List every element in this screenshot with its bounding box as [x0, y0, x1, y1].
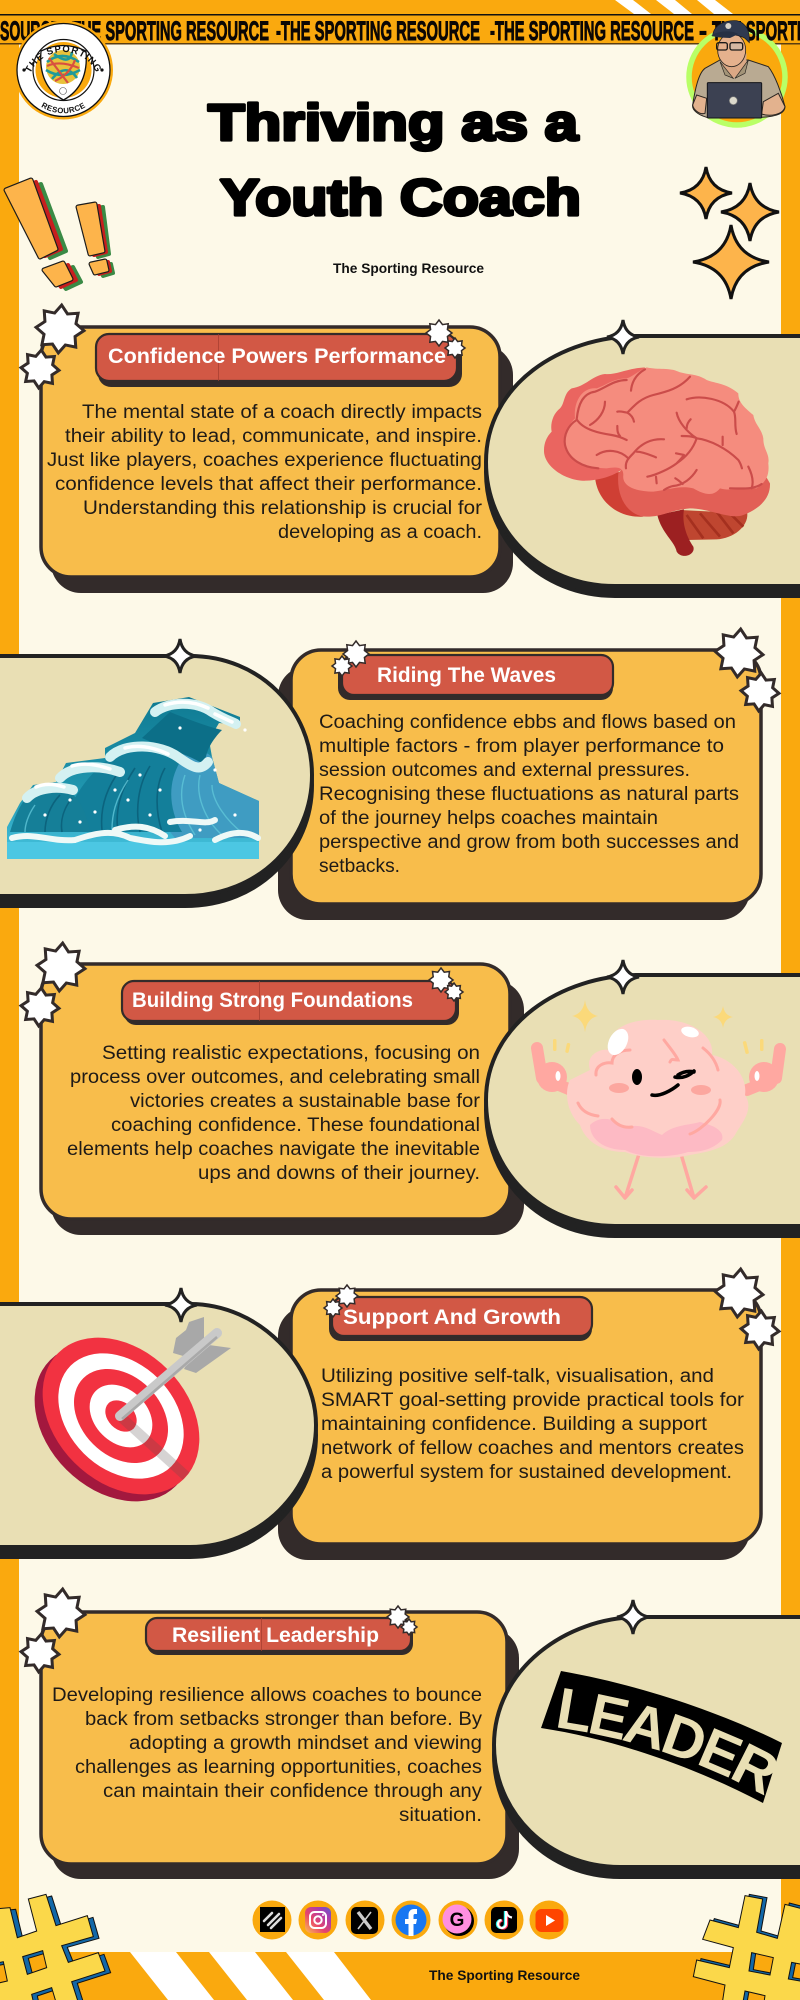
card shadow and body	[278, 650, 761, 920]
body text: of the journey helps coaches maintain	[319, 807, 658, 829]
avatar ring	[689, 29, 785, 125]
icon: youtube	[536, 1909, 564, 1932]
image panel blob	[486, 975, 800, 1236]
heading pill: Confidence Powers Performance	[108, 345, 446, 368]
icon: x	[351, 1907, 378, 1934]
body text: Developing resilience allows coaches to bounce	[52, 1684, 482, 1706]
icon: target with arrow	[3, 1306, 231, 1533]
body text: session outcomes and external pressures.	[319, 759, 690, 781]
icon: LEADER banner: LEADER	[558, 1688, 776, 1796]
body text: Setting realistic expectations, focusing on	[102, 1042, 480, 1064]
image panel blob	[486, 336, 800, 596]
scrolling ticker text: -	[699, 16, 707, 46]
body text: victories creates a sustainable base for	[130, 1090, 480, 1112]
icon: pink G	[442, 1904, 474, 1936]
body text: Understanding this relationship is crucial for	[83, 497, 482, 519]
body text: ups and downs of their journey.	[198, 1162, 480, 1184]
body text: network of fellow coaches and mentors creates	[321, 1437, 744, 1459]
logo badge: THE SPORTING	[25, 46, 101, 72]
body text: elements help coaches navigate the inevitable	[67, 1138, 480, 1160]
icon: hash symbol right	[693, 1894, 800, 2000]
icon: happy flexing brain	[537, 1000, 780, 1198]
scrolling ticker text: -THE SPORTING RESOURCE	[276, 16, 480, 46]
body text: Coaching confidence ebbs and flows based on	[319, 711, 736, 733]
decorative stars	[20, 941, 463, 1027]
body text: their ability to lead, communicate, and inspire.	[65, 425, 482, 447]
title: Thriving as a	[208, 94, 579, 151]
heading pill	[338, 655, 613, 700]
icon: ocean wave	[7, 697, 259, 859]
body text: confidence levels that affect their performance.	[55, 473, 482, 495]
body text: multiple factors - from player performance to	[319, 735, 724, 757]
body text: Just like players, coaches experience fluctuating	[47, 449, 482, 471]
avatar coach with laptop	[693, 21, 785, 118]
icon: tiktok	[491, 1907, 517, 1933]
panel: Confidence Powers Performance	[20, 303, 800, 596]
decorative stars	[20, 1587, 417, 1673]
icon: gold sparkles	[680, 167, 779, 299]
title	[208, 94, 581, 226]
body text: setbacks.	[319, 855, 400, 877]
icon: squarespace	[260, 1907, 285, 1932]
logo badge	[16, 21, 113, 120]
body text: coaching confidence. These foundational	[111, 1114, 480, 1136]
decorative stars	[324, 1267, 780, 1350]
body text: Utilizing positive self-talk, visualisation, and	[321, 1365, 714, 1387]
heading pill	[146, 1618, 413, 1655]
image panel blob	[0, 656, 312, 906]
icon: exclamation marks	[6, 180, 113, 289]
sparkle	[607, 960, 639, 994]
body text	[52, 1684, 482, 1826]
body text: SMART goal-setting provide practical tools for	[321, 1389, 744, 1411]
icon: instagram	[305, 1907, 331, 1933]
card shadow and body	[41, 964, 524, 1235]
body text: perspective and grow from both successes and	[319, 831, 739, 853]
heading pill	[122, 981, 459, 1025]
body text: situation.	[399, 1804, 482, 1826]
sparkle	[607, 320, 639, 354]
body text: a powerful system for sustained development.	[321, 1461, 732, 1483]
body text: can maintain their confidence through any	[103, 1780, 482, 1802]
footer brand text: The Sporting Resource	[429, 1968, 580, 1983]
body text	[319, 711, 739, 877]
body text: Recognising these fluctuations as natural parts	[319, 783, 739, 805]
sparkle	[617, 1600, 649, 1634]
body text: developing as a coach.	[278, 521, 482, 543]
body text	[67, 1042, 480, 1184]
icon: pink G: G	[450, 1910, 464, 1931]
decorative stars	[20, 303, 465, 389]
icon: facebook	[396, 1904, 426, 1936]
sparkle	[165, 1288, 197, 1322]
card shadow and body	[278, 1290, 761, 1560]
social media icons row	[252, 1900, 568, 1940]
body text: maintaining confidence. Building a support	[321, 1413, 708, 1435]
image panel blob	[0, 1304, 316, 1557]
top orange band with stripes	[0, 0, 800, 44]
scrolling ticker text	[0, 16, 800, 46]
subtitle: The Sporting Resource	[333, 261, 484, 276]
body text	[321, 1365, 744, 1483]
logo badge: RESOURCE	[41, 102, 86, 114]
heading pill	[329, 1297, 592, 1341]
body text: back from setbacks stronger than before. By	[85, 1708, 482, 1730]
body text: The mental state of a coach directly impacts	[82, 401, 482, 423]
decorative stars	[332, 627, 780, 712]
panel: Support And Growth	[0, 1267, 780, 1560]
card shadow and body	[41, 1612, 519, 1879]
rubber band ball	[46, 50, 80, 84]
body text: adopting a growth mindset and viewing	[129, 1732, 482, 1754]
title: Youth Coach	[220, 169, 581, 226]
body text: challenges as learning opportunities, coaches	[75, 1756, 482, 1778]
panel: Riding The Waves	[0, 627, 780, 920]
heading pill: Resilient Leadership	[172, 1624, 379, 1647]
scrolling ticker text: THE SPORTING RESOURCE	[72, 16, 269, 46]
scrolling ticker text: SOURCE	[0, 16, 60, 46]
sparkle	[164, 639, 196, 673]
image panel blob	[494, 1617, 800, 1877]
heading pill: Support And Growth	[343, 1306, 561, 1329]
icon: hash symbol left	[0, 1894, 111, 2000]
card shadow and body	[41, 327, 513, 593]
heading pill: Building Strong Foundations	[132, 989, 413, 1012]
body text	[47, 401, 482, 543]
heading pill	[96, 334, 462, 387]
panel: Resilient Leadership	[18, 1586, 800, 1879]
body text: process over outcomes, and celebrating small	[70, 1066, 480, 1088]
panel: Building Strong Foundations	[20, 941, 800, 1236]
heading pill: Riding The Waves	[377, 664, 556, 687]
icon: brain	[544, 367, 770, 556]
footer band with stripes	[0, 1952, 800, 2000]
